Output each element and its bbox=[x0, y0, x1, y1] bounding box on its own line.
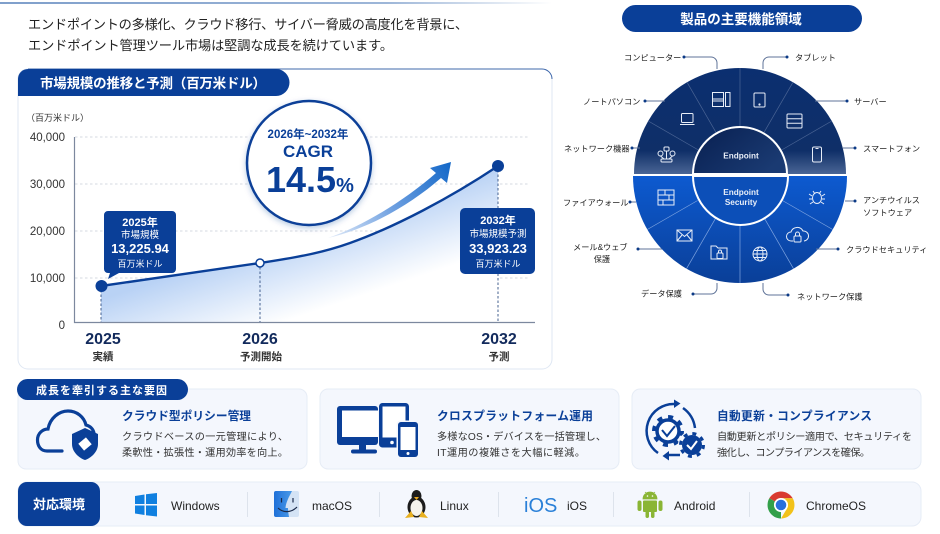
lower half: endpoint security bbox=[633, 176, 847, 283]
icon: laptop bbox=[680, 114, 694, 124]
icon: firewall bbox=[658, 190, 674, 205]
callout: CAGR: 2026年~2032年 bbox=[268, 127, 349, 141]
platform: Linux bbox=[405, 490, 469, 518]
label: tablet bbox=[763, 52, 836, 69]
panel heading: 市場規模の推移と予測（百万米ドル） bbox=[40, 75, 266, 91]
x axis labels: 予測開始 bbox=[240, 350, 282, 363]
card text: 自動更新とポリシー適用で、セキュリティを bbox=[717, 430, 912, 443]
callout: 2025 value bbox=[104, 211, 176, 279]
x axis labels: 実績 bbox=[92, 350, 114, 363]
platform: macOS: macOS bbox=[312, 499, 352, 513]
label: computer bbox=[624, 54, 717, 69]
card text: 柔軟性・拡張性・運用効率を向上。 bbox=[122, 446, 288, 459]
icon: network device bbox=[658, 147, 675, 162]
chart: function wheel bbox=[633, 68, 847, 283]
label: antivirus: ソフトウェア bbox=[863, 208, 912, 218]
platform: iOS bbox=[524, 495, 587, 517]
card: cloud policy management bbox=[18, 389, 307, 469]
icon: cloud lock bbox=[787, 227, 809, 242]
icon: data folder lock bbox=[711, 246, 727, 259]
growth arrow bbox=[328, 162, 451, 238]
x axis labels bbox=[85, 331, 517, 363]
label: computer: コンピューター bbox=[624, 54, 681, 62]
label: data protection bbox=[641, 283, 717, 298]
x axis labels: 2025 bbox=[85, 331, 121, 348]
label: network protection: ネットワーク保護 bbox=[797, 292, 863, 302]
platform heading: 対応環境 bbox=[33, 497, 85, 512]
data points bbox=[96, 160, 504, 292]
callout: 2025 value: 市場規模 bbox=[121, 229, 159, 241]
y axis unit: （百万米ドル） bbox=[26, 112, 89, 123]
label: data protection: データ保護 bbox=[641, 288, 682, 298]
panel heading bbox=[18, 69, 290, 96]
intro text: エンドポイント管理ツール市場は堅調な成長を続けています。 bbox=[28, 38, 393, 53]
card text: IT運用の複雑さを大幅に軽減。 bbox=[437, 446, 585, 459]
icon: mail bbox=[677, 230, 692, 241]
platform: Windows: Windows bbox=[171, 499, 220, 513]
callout: 2032 value: 百万米ドル bbox=[475, 258, 521, 269]
label: network devices: ネットワーク機器 bbox=[564, 144, 630, 154]
trend line bbox=[101, 166, 498, 286]
icon: tablet bbox=[754, 93, 765, 107]
platform: iOS: iOS bbox=[567, 499, 587, 513]
platform: iOS: iOS bbox=[524, 495, 557, 517]
icon: devices bbox=[337, 402, 420, 458]
area under curve bbox=[101, 166, 498, 322]
intro text bbox=[28, 16, 468, 53]
platform: Windows bbox=[135, 493, 220, 516]
platform: Android: Android bbox=[674, 499, 715, 513]
y axis labels: 30,000 bbox=[30, 179, 65, 191]
heading: product function areas: 製品の主要機能領域 bbox=[680, 11, 802, 27]
label: cloud security: クラウドセキュリティ bbox=[846, 246, 927, 254]
center: endpoint security bbox=[693, 176, 788, 225]
top accent line bbox=[0, 2, 552, 4]
panel: supported platforms bbox=[18, 482, 921, 526]
callout: 2032 value: 33,923.23 bbox=[469, 241, 527, 256]
icon: gears bbox=[647, 400, 706, 460]
center: endpoint security: Endpoint bbox=[723, 188, 759, 197]
y axis labels: 20,000 bbox=[30, 226, 65, 238]
icon: bug bbox=[809, 191, 825, 204]
label: mail and web bbox=[573, 242, 662, 264]
icon: smartphone bbox=[812, 147, 822, 162]
callout: 2032 value: 2032年 bbox=[480, 213, 516, 227]
card text bbox=[717, 409, 912, 459]
upper half: endpoint bbox=[634, 68, 846, 174]
label: mail and web: メール&ウェブ bbox=[573, 242, 628, 252]
platform heading bbox=[18, 482, 100, 526]
callout: 2025 value: 百万米ドル bbox=[117, 258, 163, 269]
axes bbox=[74, 137, 535, 322]
icon: cloud shield bbox=[38, 411, 98, 460]
platform: Android bbox=[638, 492, 715, 518]
y axis labels: 10,000 bbox=[30, 273, 65, 285]
center: endpoint security: Security bbox=[725, 198, 758, 207]
icon: computer bbox=[712, 92, 730, 106]
callout: 2025 value: 2025年 bbox=[122, 215, 158, 229]
callout: 2025 value: 13,225.94 bbox=[111, 241, 170, 256]
platform: macOS bbox=[274, 491, 352, 517]
x axis labels: 予測 bbox=[488, 350, 510, 363]
platform: ChromeOS bbox=[768, 492, 866, 518]
label: tablet: タブレット bbox=[795, 52, 836, 62]
panel: market size chart bbox=[18, 69, 552, 369]
label: laptop bbox=[583, 98, 665, 106]
callout: CAGR: 14.5% bbox=[266, 159, 354, 200]
platform: Linux: Linux bbox=[440, 499, 469, 513]
card text: クロスプラットフォーム運用 bbox=[437, 409, 593, 423]
icon: network globe bbox=[753, 247, 767, 261]
x axis labels: 2032 bbox=[481, 331, 517, 348]
intro text: エンドポイントの多様化、クラウド移行、サイバー脅威の高度化を背景に、 bbox=[28, 16, 468, 32]
card text: クラウドベースの一元管理により、 bbox=[122, 430, 288, 443]
y axis labels: 40,000 bbox=[30, 132, 65, 144]
label: firewall: ファイアウォール bbox=[563, 198, 629, 208]
card text bbox=[122, 409, 288, 459]
label: laptop: ノートパソコン bbox=[583, 98, 640, 106]
label: network protection bbox=[763, 283, 863, 302]
callout: CAGR: CAGR bbox=[283, 142, 333, 161]
platform: ChromeOS: ChromeOS bbox=[806, 499, 866, 513]
x axis labels: 2026 bbox=[242, 331, 278, 348]
label: mail and web: 保護 bbox=[594, 254, 610, 264]
card text: クラウド型ポリシー管理 bbox=[122, 409, 251, 423]
label: antivirus: アンチウイルス bbox=[863, 196, 920, 205]
card text: 自動更新・コンプライアンス bbox=[717, 409, 872, 423]
heading: growth drivers bbox=[17, 379, 188, 400]
y axis labels bbox=[30, 132, 65, 332]
center: endpoint bbox=[693, 127, 787, 174]
heading: growth drivers: 成長を牽引する主な要因 bbox=[36, 383, 168, 397]
icon: server bbox=[787, 114, 802, 128]
callout: CAGR bbox=[247, 101, 371, 225]
callout: 2032 value bbox=[460, 208, 535, 274]
card text bbox=[437, 409, 606, 459]
label: server bbox=[815, 98, 887, 106]
label: smartphone: スマートフォン bbox=[863, 144, 920, 154]
card text: 多様なOS・デバイスを一括管理し、 bbox=[437, 430, 606, 443]
center: endpoint: Endpoint bbox=[723, 152, 759, 160]
callout: 2032 value: 市場規模予測 bbox=[469, 228, 527, 240]
card: cross platform bbox=[320, 389, 619, 469]
card: auto update and compliance bbox=[632, 389, 921, 469]
label: antivirus bbox=[845, 196, 920, 218]
label: server: サーバー bbox=[854, 98, 887, 106]
y axis labels: 0 bbox=[59, 320, 65, 332]
card text: 強化し、コンプライアンスを確保。 bbox=[717, 446, 870, 459]
heading: product function areas bbox=[622, 5, 862, 32]
